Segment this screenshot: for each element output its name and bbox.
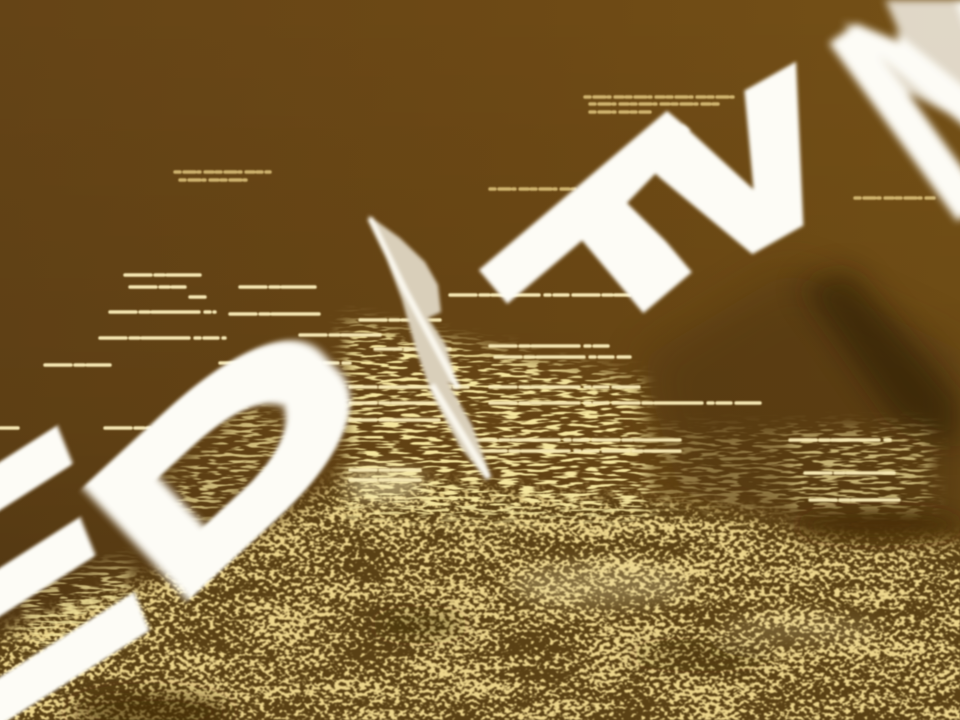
shimmer lines bbox=[0, 275, 900, 500]
letter I bbox=[365, 214, 494, 482]
letter V: V bbox=[619, 25, 872, 323]
sparkling water speckle bbox=[0, 440, 960, 720]
upper reflections bbox=[175, 97, 935, 198]
letter I: I bbox=[263, 102, 596, 588]
dark silhouette bbox=[640, 270, 960, 530]
letter M bbox=[824, 0, 960, 226]
water light and shadow patches bbox=[70, 469, 960, 720]
streaked water bbox=[0, 300, 960, 660]
letter T: T bbox=[460, 81, 785, 397]
letter D: D bbox=[41, 273, 418, 642]
